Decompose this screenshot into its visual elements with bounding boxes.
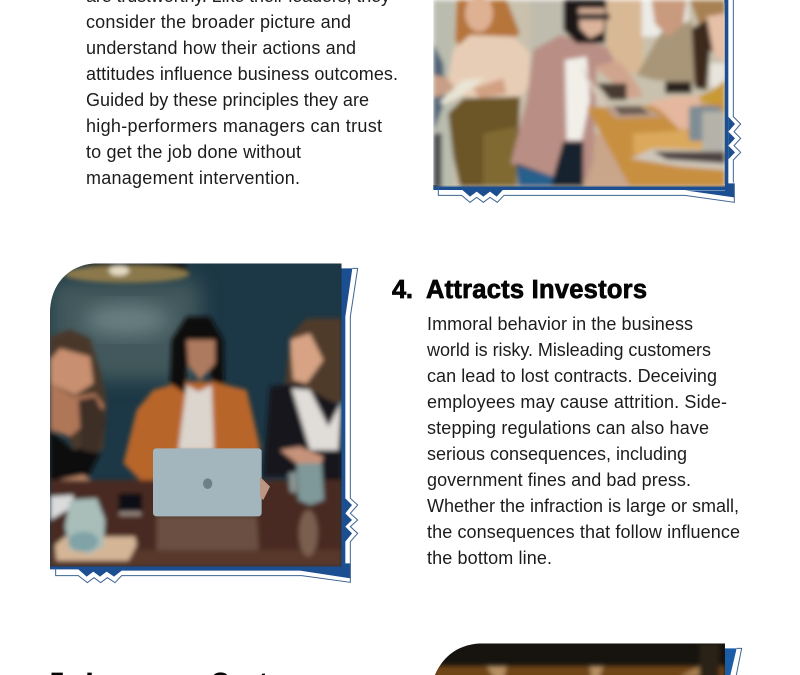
- photo panel: team around a table with frame: [433, 0, 741, 202]
- text block: section 4 body copy: the consequences that follow influence: [427, 522, 740, 542]
- photo: coworkers at a standing table: [433, 0, 727, 188]
- text block: section 4 body copy: government fines and bad press.: [427, 470, 691, 490]
- photo: dark ceiling and wood beams: [433, 643, 725, 675]
- icon: laptop: [153, 448, 270, 516]
- heading: 4. Attracts Investors: 4.: [392, 276, 413, 304]
- text block: section 3 body copy: management intervention.: [86, 168, 300, 188]
- text block: section 3 body copy: understand how their actions and: [86, 38, 356, 58]
- text block: section 4 body copy: Whether the infraction is large or small,: [427, 496, 739, 516]
- text block: section 4 body copy: the bottom line.: [427, 548, 552, 568]
- text block: section 4 body copy: Immoral behavior in the business: [427, 314, 693, 334]
- photo panel: three women at a laptop with frame: [50, 263, 358, 583]
- text block: section 3 body copy: Guided by these principles they are: [86, 90, 369, 110]
- text block: section 3 body copy: consider the broader picture and: [86, 12, 351, 32]
- photo panel: section 5 photo with frame: [433, 643, 742, 675]
- frame: blue offset border with zigzags: [50, 268, 358, 583]
- text block: section 4 body copy: world is risky. Misleading customers: [426, 340, 711, 360]
- text block: section 4 body copy: employees may cause attrition. Side-: [427, 392, 727, 412]
- text block: section 3 body copy: to get the job done without: [86, 142, 301, 162]
- text block: section 3 body copy: attitudes influence business outcomes.: [86, 64, 398, 84]
- frame: blue offset border: [723, 648, 742, 675]
- text block: section 3 body copy: [86, 0, 398, 188]
- text block: section 4 body copy: stepping regulations can also have: [427, 418, 709, 438]
- photo: women reviewing a laptop: [50, 263, 342, 567]
- heading: 4. Attracts Investors: Attracts Investors: [426, 276, 647, 304]
- text block: section 4 body copy: [426, 314, 740, 568]
- text block: section 4 body copy: can lead to lost contracts. Deceiving: [427, 366, 717, 386]
- text block: section 4 body copy: serious consequences, including: [427, 444, 687, 464]
- text block: section 3 body copy: high-performers managers can trust: [86, 116, 382, 136]
- frame: blue offset border with zigzags: [433, 0, 741, 202]
